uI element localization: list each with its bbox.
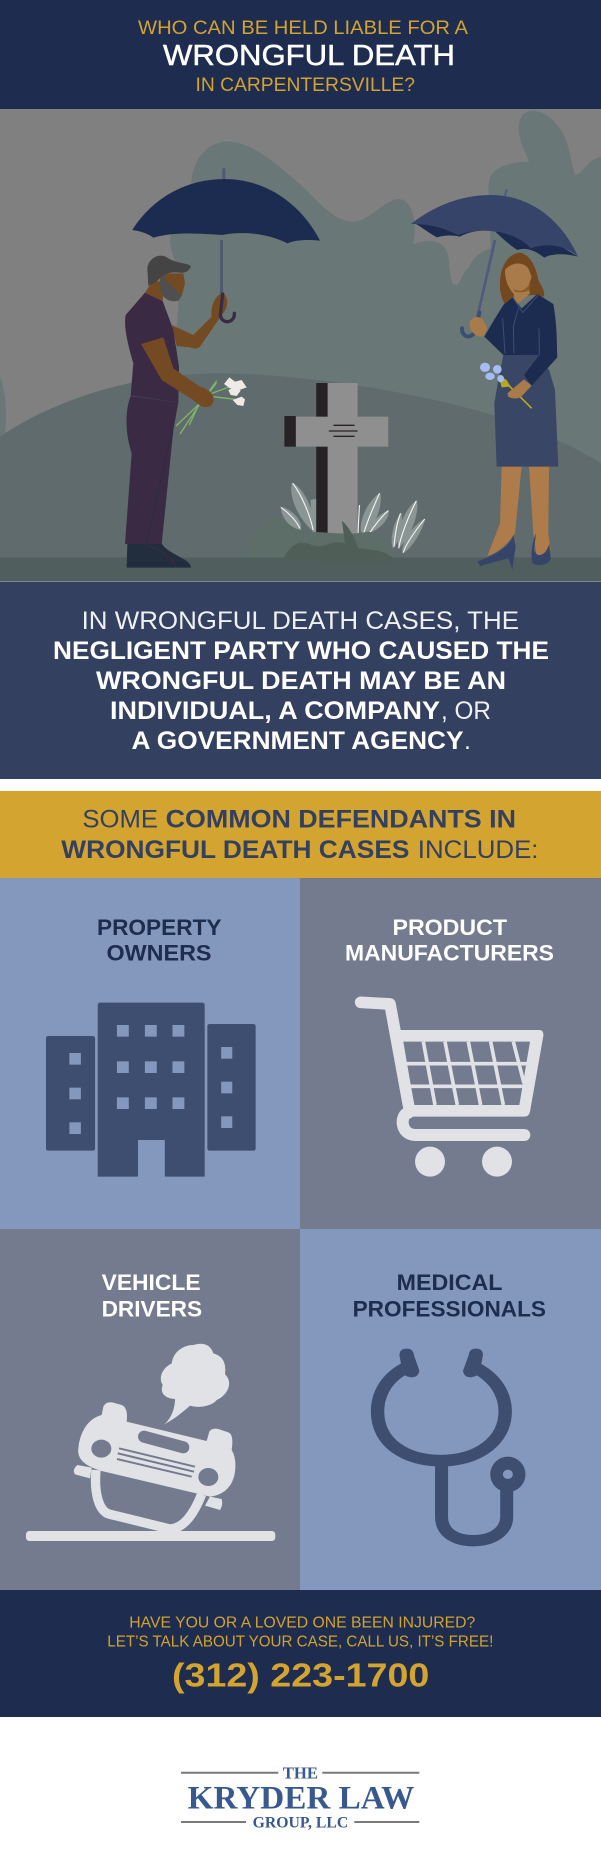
label: MANUFACTURERS — [345, 941, 554, 966]
statement text: . — [464, 727, 471, 755]
call to action text: HAVE YOU OR A LOVED ONE BEEN INJURED? — [129, 1614, 475, 1631]
heading — [61, 806, 539, 864]
title: WHO CAN BE HELD LIABLE FOR A — [138, 17, 468, 39]
statement text: IN WRONGFUL DEATH CASES, THE — [82, 607, 519, 635]
label: PRODUCT — [392, 915, 508, 940]
label: OWNERS — [106, 941, 212, 966]
label: DRIVERS — [102, 1297, 202, 1322]
ground — [0, 557, 601, 582]
label — [97, 915, 222, 966]
logo — [181, 1764, 419, 1832]
heading: WRONGFUL DEATH CASES — [61, 836, 409, 864]
logo: KRYDER LAW — [188, 1780, 414, 1816]
icon: stethoscope — [378, 1349, 525, 1541]
umbrella: woman — [411, 189, 578, 258]
heading: COMMON DEFENDANTS IN — [166, 806, 516, 834]
panel: product manufacturers — [300, 878, 601, 1229]
call to action text — [107, 1614, 493, 1650]
left edge shrub — [0, 377, 6, 443]
statement text: , OR — [441, 697, 491, 725]
label: VEHICLE — [102, 1270, 201, 1295]
panel: property owners — [0, 878, 300, 1229]
plants behind cross — [281, 482, 425, 553]
heading: INCLUDE: — [418, 836, 538, 864]
logo: GROUP, LLC — [253, 1815, 348, 1832]
hill — [0, 373, 601, 557]
logo: THE — [283, 1764, 318, 1783]
call to action text: LET’S TALK ABOUT YOUR CASE, CALL US, IT’S FREE! — [107, 1633, 493, 1650]
flowers: lilies — [224, 377, 247, 406]
label — [353, 1270, 546, 1322]
label: MEDICAL — [397, 1270, 503, 1295]
man holding umbrella and flowers — [125, 240, 247, 568]
panel: illustration of mourners at a grave — [0, 109, 601, 582]
heading: SOME — [82, 806, 158, 834]
icon: overturned car with smoke — [26, 1344, 275, 1541]
label — [102, 1270, 202, 1322]
panel: intro statement — [0, 582, 601, 779]
title: WRONGFUL DEATH — [163, 40, 455, 72]
statement text: A GOVERNMENT AGENCY — [132, 727, 464, 755]
umbrella: man — [132, 168, 320, 243]
statement text — [53, 607, 549, 755]
statement text: WRONGFUL DEATH MAY BE AN — [96, 667, 506, 695]
woman holding umbrella and flowers — [462, 240, 558, 570]
panel: header — [0, 0, 601, 109]
title — [138, 17, 468, 96]
background foliage — [169, 111, 601, 467]
panel: vehicle drivers — [0, 1229, 300, 1590]
title: IN CARPENTERSVILLE? — [196, 74, 415, 96]
panel: medical professionals — [300, 1229, 601, 1590]
label — [345, 915, 554, 966]
bushes at base of cross — [241, 515, 397, 563]
panel: call to action — [0, 1590, 601, 1717]
statement text: NEGLIGENT PARTY WHO CAUSED THE — [53, 637, 549, 665]
phone number: (312) 223-1700 — [172, 1657, 429, 1694]
flowers: blue tulips — [480, 363, 532, 408]
statement text: INDIVIDUAL, A COMPANY — [110, 697, 440, 725]
cross gravestone — [284, 383, 388, 547]
panel: common defendants heading — [0, 791, 601, 878]
label: PROPERTY — [97, 915, 222, 940]
icon: shopping cart — [361, 1002, 543, 1177]
label: PROFESSIONALS — [353, 1297, 546, 1322]
icon: buildings — [46, 1003, 256, 1177]
